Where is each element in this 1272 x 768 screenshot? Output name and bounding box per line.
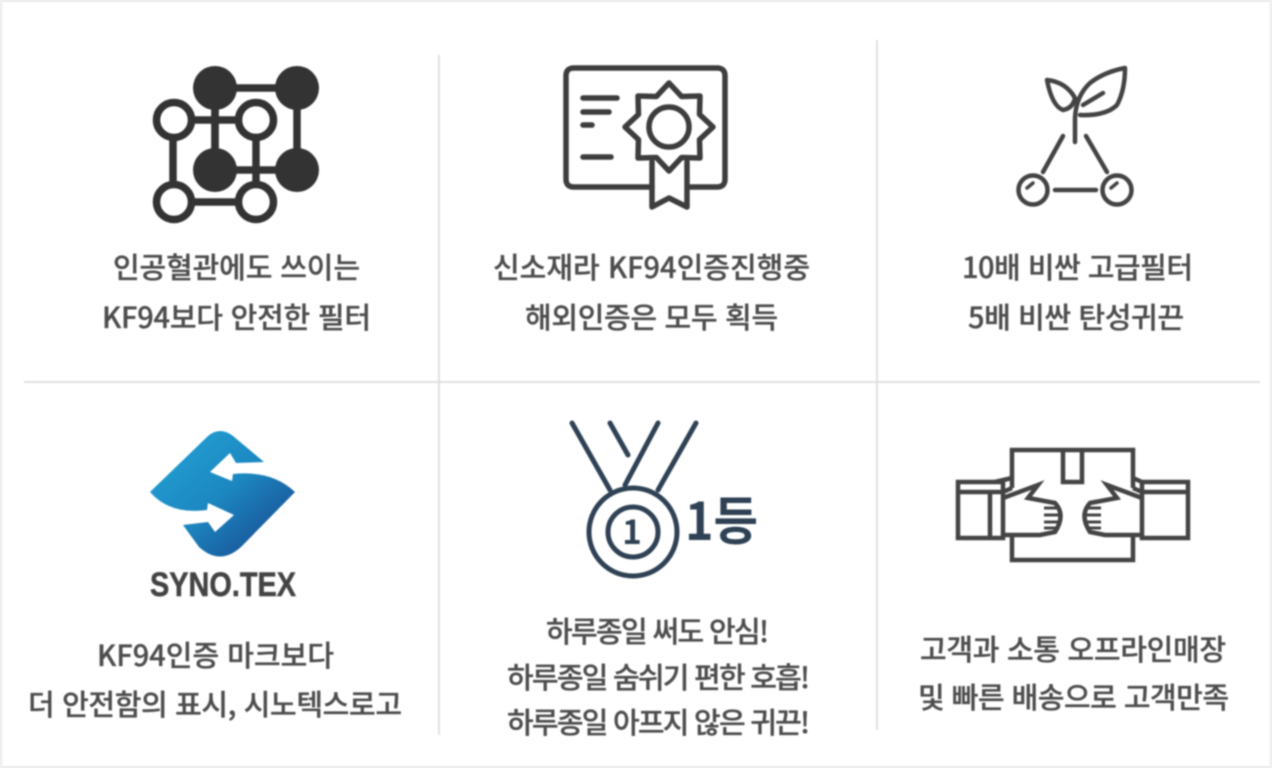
text: SYNO.TEX logo safety: [28, 633, 402, 724]
logo: SYNO.TEX: SYNO.TEX: [150, 566, 296, 604]
text: expensive filter and ear bands: 10배 비싼 고급필터: [962, 245, 1193, 287]
icon: molecular network filter: [156, 66, 319, 220]
text: all-day comfort: 하루종일 써도 안심!: [546, 609, 769, 651]
text: artificial blood vessel filter: [102, 245, 371, 337]
icon: plant and carbon molecule: [1018, 68, 1132, 204]
text: new material certification: 해외인증은 모두 획득: [525, 295, 778, 337]
text: new material certification: [493, 245, 810, 337]
text: artificial blood vessel filter: KF94보다 안전한 필터: [102, 295, 371, 337]
text: expensive filter and ear bands: 5배 비싼 탄성귀끈: [968, 295, 1184, 337]
icon: certificate with rosette: [566, 68, 725, 207]
icon: first place medal: 1: [622, 506, 642, 554]
text: customer satisfaction: 고객과 소통 오프라인매장: [920, 627, 1226, 669]
icon: box handed between two hands: [958, 450, 1188, 560]
text: artificial blood vessel filter: 인공혈관에도 쓰이는: [113, 245, 360, 287]
text: all-day comfort: 하루종일 숨쉬기 편한 호흡!: [507, 655, 810, 697]
text: customer satisfaction: [918, 627, 1229, 717]
text: all-day comfort: 하루종일 아프지 않은 귀끈!: [507, 700, 810, 742]
icon: first place medal: [572, 423, 758, 576]
text: new material certification: 신소재라 KF94인증진행중: [493, 245, 810, 287]
text: all-day comfort: [507, 609, 810, 742]
text: customer satisfaction: 및 빠른 배송으로 고객만족: [918, 675, 1229, 717]
logo: SYNO.TEX: [150, 431, 296, 604]
text: SYNO.TEX logo safety: 더 안전함의 표시, 시노텍스로고: [28, 682, 402, 724]
text: SYNO.TEX logo safety: KF94인증 마크보다: [97, 633, 334, 675]
icon: first place medal: 1등: [685, 480, 758, 555]
text: expensive filter and ear bands: [962, 245, 1193, 337]
